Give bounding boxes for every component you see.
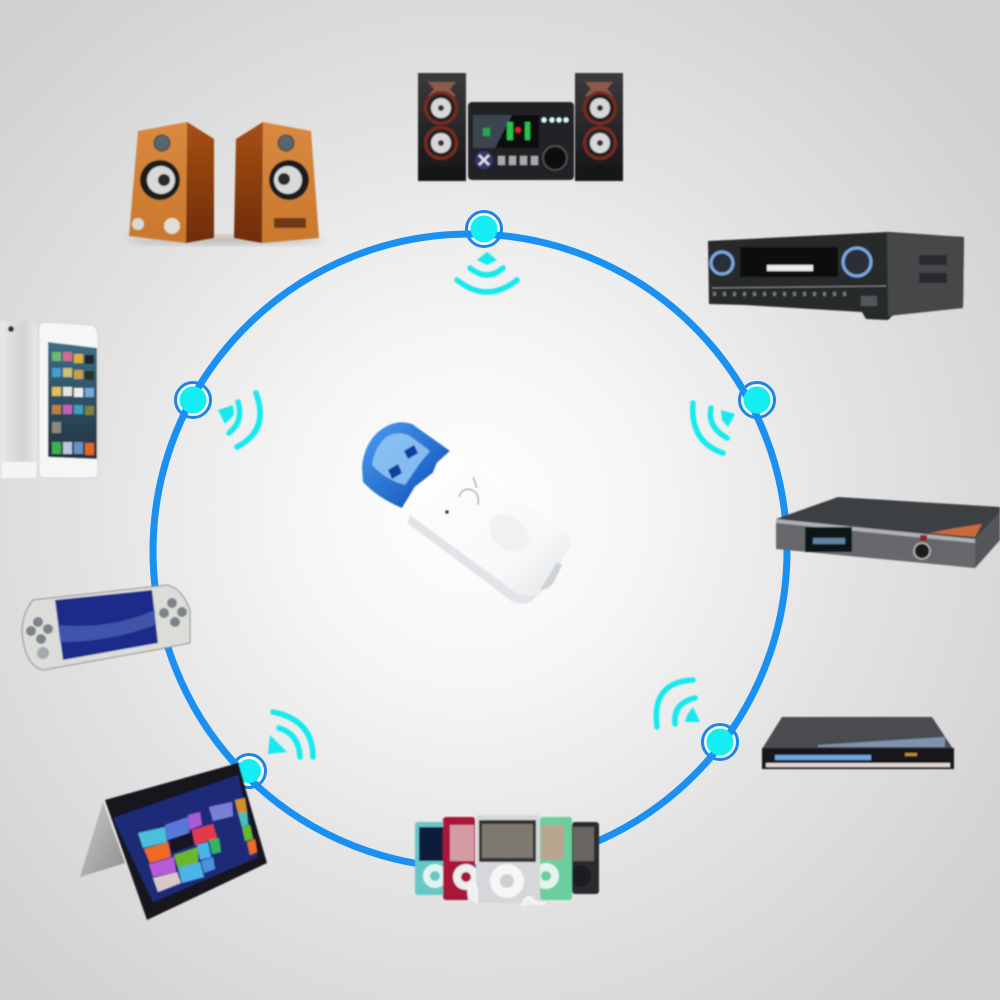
tablet tiles — [138, 798, 257, 892]
left speaker — [129, 122, 214, 243]
right speaker — [234, 122, 319, 243]
centre unit — [468, 102, 574, 180]
device: iPod nano family — [415, 815, 599, 906]
audio jack — [540, 562, 562, 590]
green player — [533, 817, 572, 900]
USB bluetooth dongle — [362, 422, 571, 604]
black player — [569, 822, 599, 894]
device: smartphones — [0, 321, 98, 478]
right tower — [575, 73, 623, 181]
status LED and logo — [445, 510, 449, 514]
earphones — [469, 884, 546, 906]
red player — [443, 817, 479, 900]
device: orange bookshelf speakers — [127, 122, 323, 244]
icon: signal upper left — [218, 393, 260, 447]
silver stand — [80, 802, 125, 877]
node backing discs — [176, 212, 774, 788]
icon: signal upper right — [693, 403, 735, 453]
device: AV amplifier — [708, 232, 964, 320]
icon: signal lower right — [656, 680, 700, 727]
ring node centres — [180, 216, 770, 783]
blue USB cap — [362, 422, 450, 508]
phone back — [0, 321, 37, 478]
device: media receiver — [776, 497, 1000, 568]
white body — [402, 452, 571, 604]
wireless signal icons — [218, 252, 735, 757]
silver player — [476, 815, 540, 903]
icon: signal lower left — [268, 712, 313, 757]
amplifier knobs — [711, 248, 871, 276]
game buttons — [26, 598, 187, 659]
left tower — [418, 73, 466, 181]
phone front — [39, 322, 98, 478]
device: handheld game console — [22, 585, 190, 670]
device: hi-fi stereo system — [418, 73, 623, 181]
device: tablet laptop — [80, 763, 267, 920]
button — [482, 507, 536, 559]
device: DVD player — [762, 717, 954, 769]
icon: signal top — [457, 252, 517, 292]
connection ring — [153, 234, 787, 868]
teal player — [415, 822, 447, 895]
